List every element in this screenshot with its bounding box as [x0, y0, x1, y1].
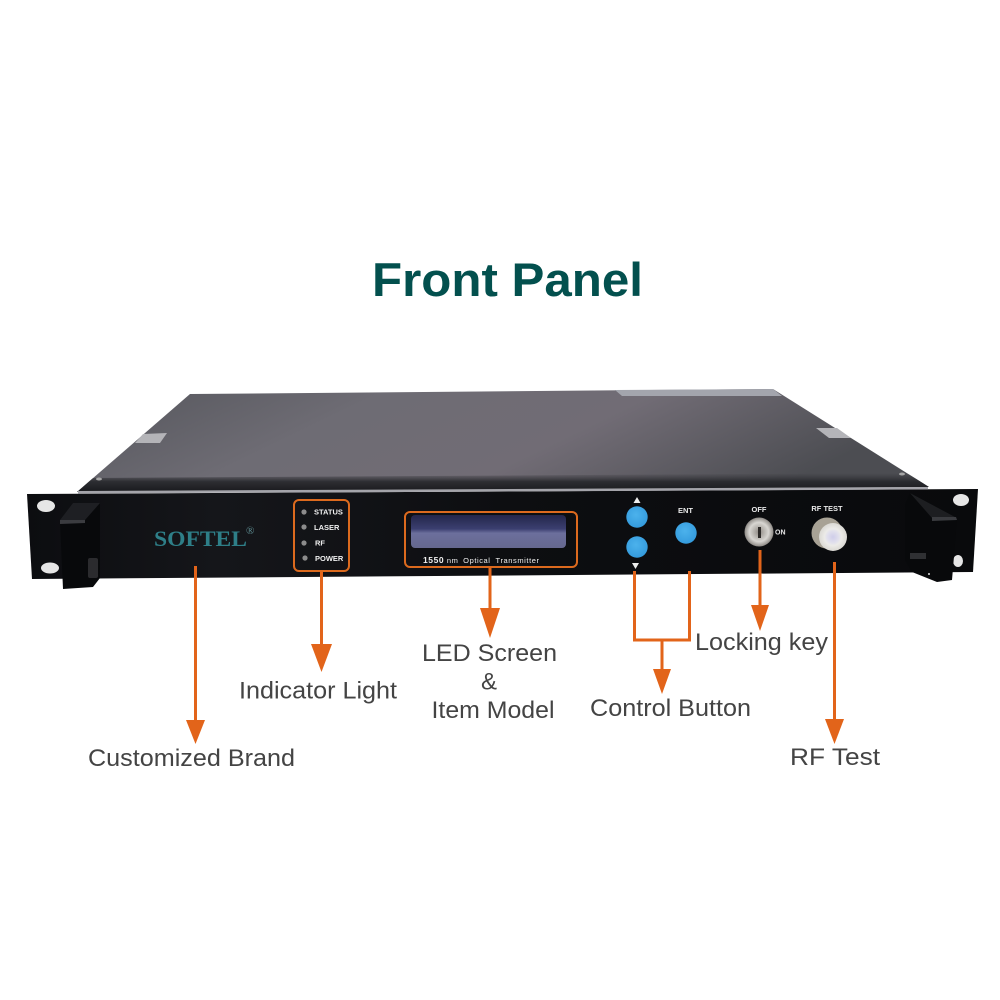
arrow: customized brand — [186, 566, 205, 744]
label: control button: Control Button — [590, 695, 751, 722]
control buttons — [626, 497, 697, 569]
indicator lights box: RF — [315, 538, 325, 548]
label: LED screen and item model: Item Model — [432, 697, 554, 724]
arrow: locking key — [751, 550, 769, 631]
LED screen box — [405, 512, 577, 567]
arrow: control button bracket — [634, 571, 690, 694]
mounting holes — [37, 494, 969, 574]
arrow: LED screen — [480, 568, 500, 638]
title: Front Panel — [372, 254, 643, 307]
indicator lights box — [294, 500, 349, 571]
LED screen box: 1550 nm Optical Transmitter — [423, 555, 540, 565]
brand logo: SOFTEL — [154, 526, 247, 551]
indicator lights box: STATUS — [314, 508, 343, 516]
arrow: RF test — [825, 562, 844, 744]
label: customized brand: Customized Brand — [88, 745, 295, 772]
label: RF test: RF Test — [790, 744, 880, 771]
label: LED screen and item model — [422, 640, 557, 724]
device top cover — [77, 389, 929, 492]
RF test port — [811, 504, 847, 551]
label: locking key: Locking key — [695, 629, 828, 656]
arrow: indicator light — [311, 572, 332, 672]
control buttons: ENT — [678, 506, 693, 515]
locking key — [744, 505, 786, 546]
locking key: OFF — [752, 505, 767, 514]
RF test port: RF TEST — [811, 504, 843, 513]
indicator lights box: POWER — [315, 554, 344, 563]
device front face — [27, 489, 978, 579]
label: LED screen and item model: & — [481, 668, 497, 696]
device: rack transmitter — [27, 389, 978, 589]
indicator lights box: LASER — [314, 523, 340, 532]
right handle — [905, 493, 957, 582]
label: LED screen and item model: LED Screen — [422, 640, 557, 667]
brand logo: ® — [246, 525, 254, 537]
label: indicator light: Indicator Light — [239, 678, 397, 704]
left handle — [60, 503, 100, 589]
locking key: ON — [775, 530, 786, 536]
